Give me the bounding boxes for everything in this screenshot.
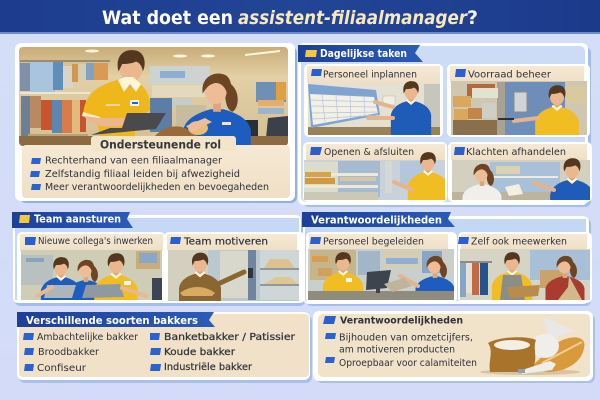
bullet list: bakkers column 2	[150, 332, 295, 373]
icon and heading: Verantwoordelijkheden	[340, 316, 463, 326]
panel: verschillende soorten bakkers	[17, 312, 312, 383]
ribbon: Dagelijkse taken	[298, 45, 423, 62]
card: Team motiveren: Team motiveren	[183, 236, 268, 248]
panel: team aansturen	[12, 212, 305, 306]
bullet list: Bijhouden van omzetcijfers,	[339, 332, 473, 344]
bullet list: Oproepbaar voor calamiteiten	[339, 358, 477, 369]
illustration: manager with tablet and colleague in shop	[19, 47, 288, 146]
title: assistent-filiaalmanager	[238, 7, 468, 29]
bullet list: Rechterhand van een filiaalmanager	[45, 156, 222, 166]
card: Zelf ook meewerken: Zelf ook meewerken	[471, 236, 567, 248]
bullet list: bakkers column 1: Confiseur	[37, 363, 86, 374]
bullet list: Zelfstandig filiaal leiden bij afwezigheid	[45, 169, 240, 180]
card: Voorraad beheer	[447, 64, 590, 137]
card: Klachten afhandelen: Klachten afhandelen	[466, 147, 566, 158]
bullet list	[325, 332, 477, 369]
card: Klachten afhandelen	[448, 142, 592, 202]
ribbon: Team aansturen	[12, 212, 133, 228]
panel: ondersteunende rol	[15, 43, 297, 203]
bullet list: bakkers column 1	[23, 332, 138, 374]
bullet list: bakkers column 1: Broodbakker	[38, 347, 99, 358]
text area	[22, 145, 290, 198]
bullet list: bakkers column 2: Koude bakker	[164, 347, 235, 358]
panel: verantwoordelijkheden taken	[302, 212, 592, 314]
card: Personeel inplannen: Personeel inplannen	[323, 70, 417, 80]
card: Nieuwe collega's inwerken	[17, 232, 164, 300]
bullet list: bakkers column 2: Industriële bakker	[164, 362, 252, 373]
panel: verantwoordelijkheden tekst	[313, 311, 595, 383]
bullet list: am motiveren producten	[339, 344, 455, 356]
title	[102, 7, 478, 29]
ribbon: Verantwoordelijkheden: Verantwoordelijkheden	[311, 214, 442, 226]
bullet list: bakkers column 2: Banketbakker / Patissier	[164, 332, 295, 343]
card: Nieuwe collega's inwerken: Nieuwe collega's inwerken	[38, 236, 153, 247]
card: Voorraad beheer: Voorraad beheer	[468, 70, 551, 80]
title: ?	[467, 7, 478, 29]
card: Openen & afsluiten	[303, 142, 447, 202]
bullet list: Meer verantwoordelijkheden en bevoegaheden	[45, 182, 269, 193]
panel: dagelijkse taken	[298, 43, 594, 222]
bullet list	[30, 156, 269, 193]
card: Team motiveren	[164, 232, 304, 303]
title: Wat doet een	[102, 7, 233, 29]
card: Personeel begeleiden	[306, 232, 457, 301]
heading: Ondersteunende rol: Ondersteunende rol	[100, 138, 221, 152]
illustration: flour sack, bag and baguettes	[480, 318, 584, 375]
ribbon: Team aansturen: Team aansturen	[34, 214, 121, 226]
card: Zelf ook meewerken	[458, 232, 592, 303]
card: Personeel begeleiden: Personeel begeleiden	[323, 236, 424, 248]
ribbon: Verschillende soorten bakkers: Verschillende soorten bakkers	[26, 314, 198, 327]
bullet list: bakkers column 1: Ambachtelijke bakker	[37, 332, 138, 343]
header banner	[0, 0, 600, 34]
card: Openen & afsluiten: Openen & afsluiten	[324, 147, 414, 158]
card: Personeel inplannen	[304, 64, 443, 138]
ribbon: Dagelijkse taken: Dagelijkse taken	[320, 48, 407, 60]
